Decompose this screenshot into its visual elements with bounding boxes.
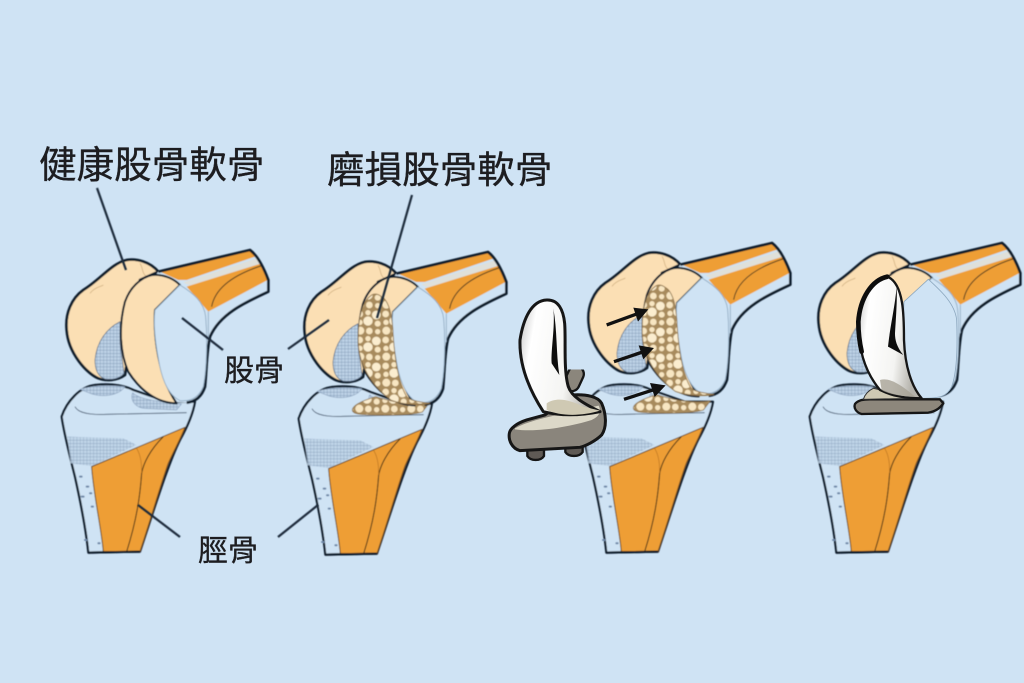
knee 2: worn cartilage xyxy=(299,252,506,555)
icon: tibial implant tray xyxy=(509,374,605,460)
icon: femoral implant, knee 3 xyxy=(520,300,600,415)
arrow: middle xyxy=(614,345,654,362)
knee 1: healthy knee xyxy=(62,250,268,553)
label: tibia: 脛骨 xyxy=(198,535,258,568)
knee 3: prepared joint with implant parts xyxy=(580,243,790,553)
arrow: top xyxy=(607,308,648,325)
label: femur: 股骨 xyxy=(224,355,284,388)
arrow: bottom xyxy=(624,383,666,399)
title: healthy femoral cartilage: 健康股骨軟骨 xyxy=(39,144,264,186)
title: worn femoral cartilage: 磨損股骨軟骨 xyxy=(327,149,552,191)
leader lines xyxy=(97,188,412,537)
icon: installed implant, knee 4 xyxy=(855,277,957,414)
knee 4: implanted knee xyxy=(810,243,1020,553)
